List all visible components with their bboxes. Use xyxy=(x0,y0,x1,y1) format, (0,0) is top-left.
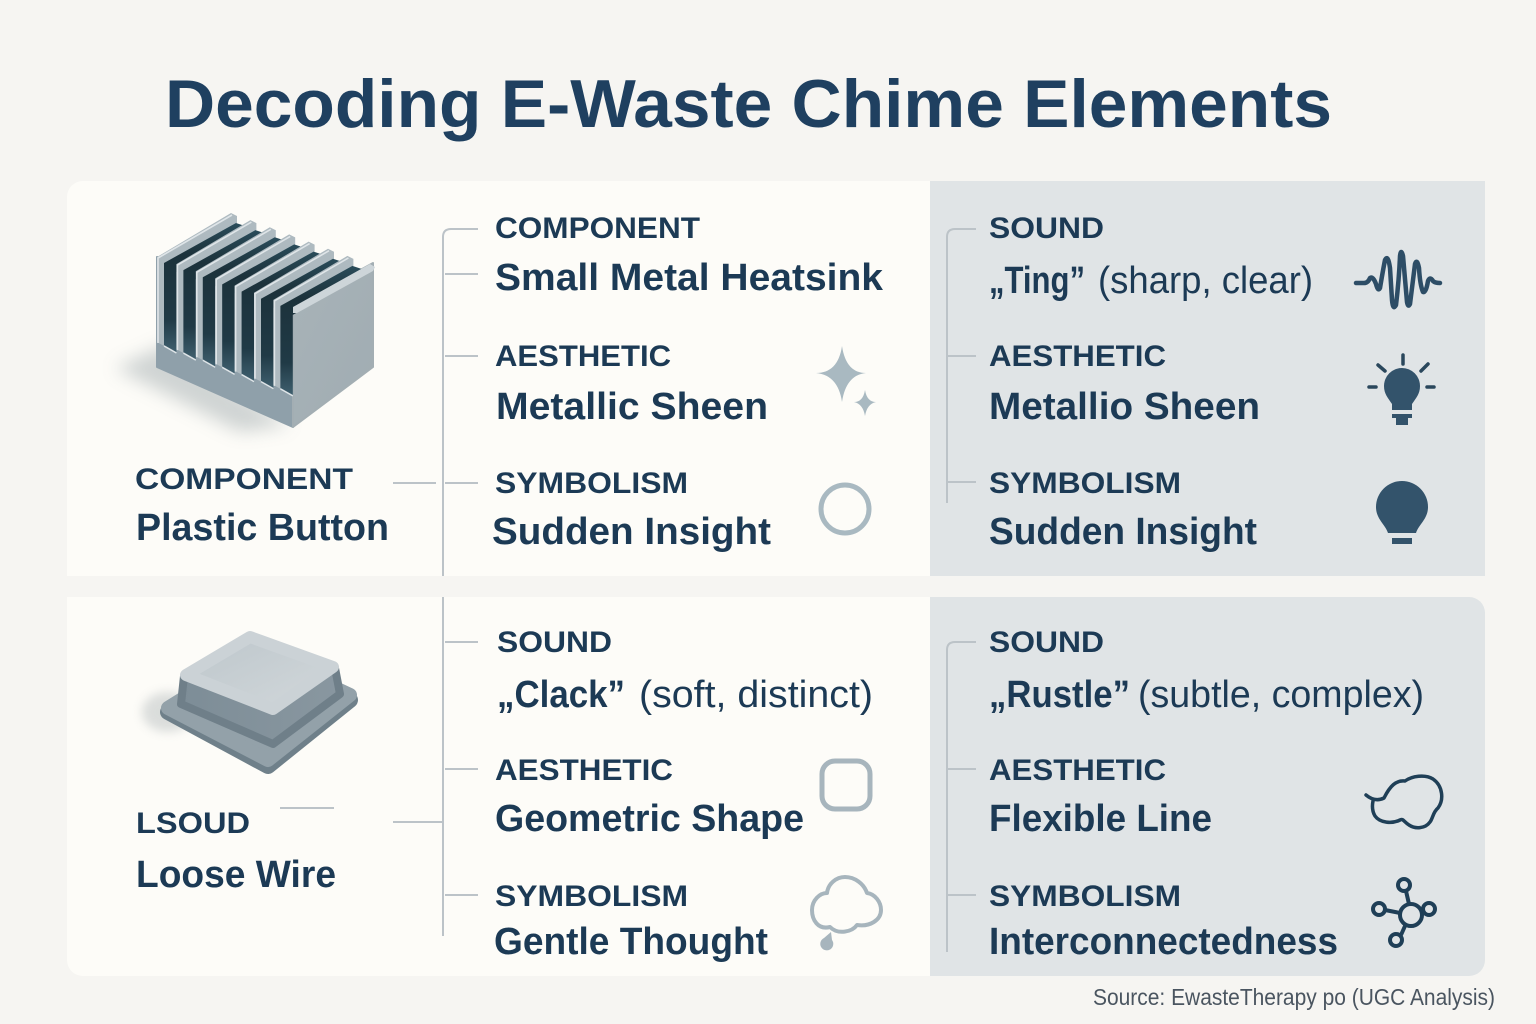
label: sound ting: (sharp, clear) xyxy=(1098,260,1313,302)
icon: rounded square xyxy=(822,761,870,809)
label: symbolism gentle thought xyxy=(494,880,768,963)
label: symbolism sudden insight right: Sudden Insight xyxy=(989,511,1257,553)
label: sound clack: SOUND xyxy=(497,626,612,659)
label: symbolism interconnectedness: SYMBOLISM xyxy=(989,880,1181,913)
panel: top row shaded xyxy=(930,181,1485,576)
label: component plastic button: COMPONENT xyxy=(135,463,353,496)
label: aesthetic metallic sheen: Metallic Sheen xyxy=(496,386,768,428)
panel: top row light xyxy=(67,181,930,576)
panel: bottom row shaded xyxy=(930,597,1485,976)
label: aesthetic metallio sheen: Metallio Sheen xyxy=(989,386,1260,428)
icon: light bulb with rays xyxy=(1369,355,1434,425)
label: symbolism sudden insight: SYMBOLISM xyxy=(495,467,688,500)
label: symbolism gentle thought: Gentle Thought xyxy=(494,921,768,963)
icon: network nodes xyxy=(1373,879,1435,946)
label: lsoud loose wire xyxy=(136,807,336,896)
label: sound ting xyxy=(989,212,1313,302)
label: lsoud loose wire: LSOUD xyxy=(136,807,250,840)
label: aesthetic metallio sheen xyxy=(989,340,1260,428)
icon: circle outline xyxy=(821,485,869,533)
icon: solid bulb xyxy=(1376,481,1428,544)
label: aesthetic geometric shape: Geometric Shape xyxy=(495,798,804,840)
label: sound ting: „Ting” xyxy=(989,260,1085,302)
label: aesthetic metallic sheen xyxy=(495,340,768,428)
label: aesthetic flexible line: AESTHETIC xyxy=(989,754,1166,787)
label: symbolism interconnectedness: Interconnectedness xyxy=(989,921,1338,963)
icon: sound wave xyxy=(1356,252,1440,307)
icon: metal heatsink xyxy=(115,213,375,432)
label: sound rustle: SOUND xyxy=(989,626,1104,659)
source note: Source: EwasteTherapy po (UGC Analysis) xyxy=(1093,984,1495,1010)
label: symbolism interconnectedness xyxy=(989,880,1338,963)
label: symbolism sudden insight right: SYMBOLISM xyxy=(989,467,1181,500)
connector lines xyxy=(280,229,976,952)
label: symbolism gentle thought: SYMBOLISM xyxy=(495,880,688,913)
label: component heatsink: COMPONENT xyxy=(495,212,700,245)
label: aesthetic metallic sheen: AESTHETIC xyxy=(495,340,671,373)
label: component plastic button: Plastic Button xyxy=(136,507,389,549)
icon: thought cloud xyxy=(812,877,881,950)
label: sound ting: SOUND xyxy=(989,212,1104,245)
icon: plastic button xyxy=(142,637,350,766)
icon: flexible line blob xyxy=(1366,776,1442,828)
label: sound rustle xyxy=(989,626,1424,716)
label: component heatsink: Small Metal Heatsink xyxy=(495,257,884,299)
label: aesthetic geometric shape: AESTHETIC xyxy=(495,754,673,787)
label: lsoud loose wire: Loose Wire xyxy=(136,854,336,896)
label: aesthetic metallio sheen: AESTHETIC xyxy=(989,340,1166,373)
label: aesthetic flexible line xyxy=(989,754,1212,840)
label: component plastic button xyxy=(135,463,389,549)
label: sound clack: „Clack” xyxy=(497,674,625,716)
label: sound rustle: „Rustle” xyxy=(989,674,1130,716)
title: Decoding E-Waste Chime Elements xyxy=(165,66,1332,142)
label: component heatsink xyxy=(495,212,884,299)
label: sound rustle: (subtle, complex) xyxy=(1138,674,1424,716)
label: symbolism sudden insight xyxy=(492,467,771,553)
label: symbolism sudden insight: Sudden Insight xyxy=(492,511,771,553)
label: sound clack: (soft, distinct) xyxy=(639,674,873,716)
icon: sparkles xyxy=(816,346,876,416)
label: aesthetic geometric shape xyxy=(495,754,804,840)
label: symbolism sudden insight right xyxy=(989,467,1257,553)
label: sound clack xyxy=(497,626,873,716)
label: aesthetic flexible line: Flexible Line xyxy=(989,798,1212,840)
panel: bottom row light xyxy=(67,597,930,976)
